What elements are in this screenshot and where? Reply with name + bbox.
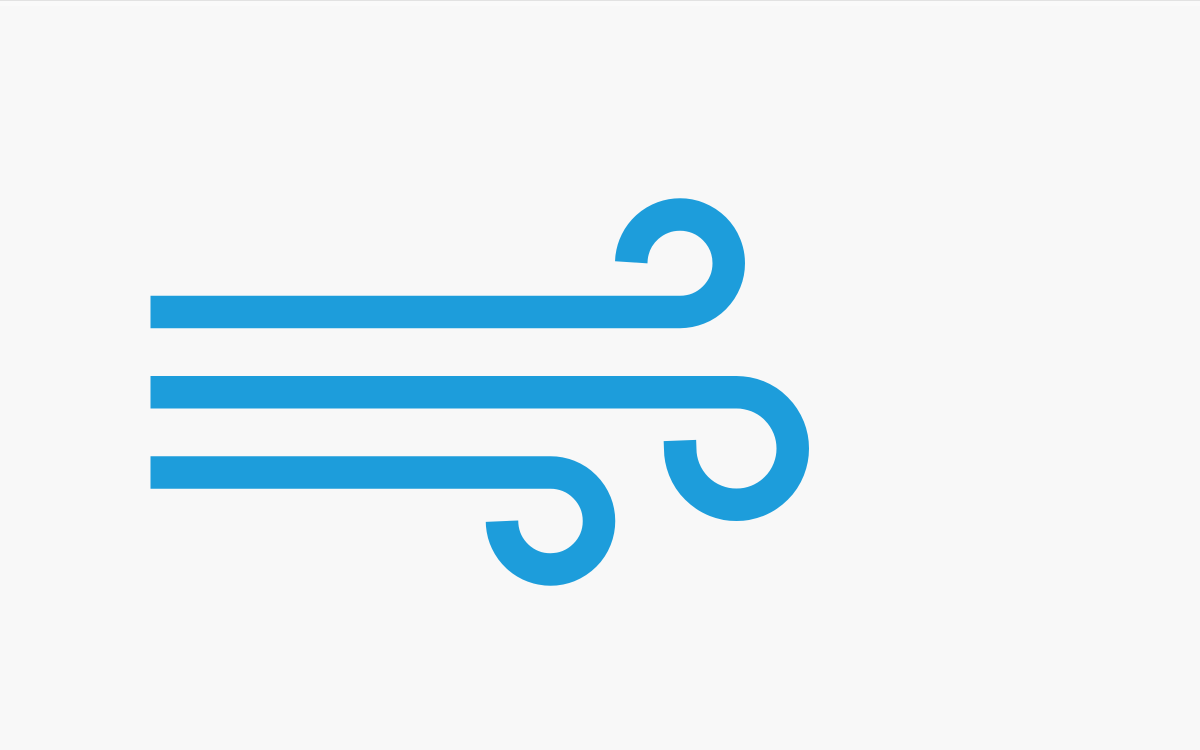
wind stream: bottom curl	[150, 472, 599, 570]
wind stream: middle curl	[150, 392, 793, 505]
wind stream: top curl	[150, 214, 729, 312]
